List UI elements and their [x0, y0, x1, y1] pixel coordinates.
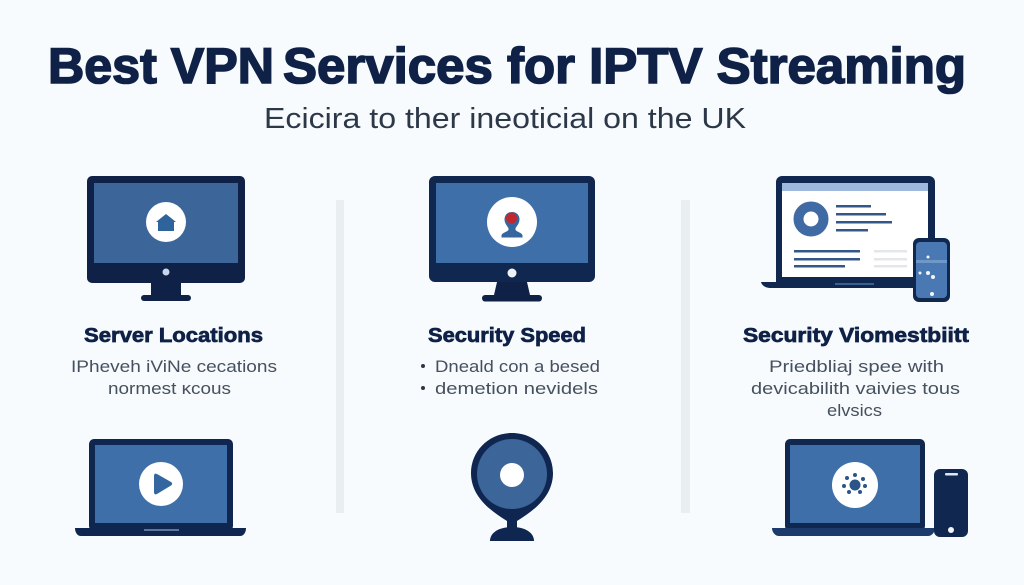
title: Services for IPTV Streaming [283, 38, 966, 94]
text: security description [751, 358, 960, 420]
icon: laptop and phone dashboard [761, 176, 950, 302]
icon: monitor with user [429, 176, 595, 302]
text: security speed bullets [421, 358, 600, 398]
text: server locations description: normest ĸcous [108, 380, 231, 398]
heading: security speed: Security Speed [428, 325, 586, 347]
text: security description: Priedbliaj spee with [769, 358, 944, 376]
heading: security viomestbiitt: Security Viomestbiitt [743, 325, 969, 347]
icon: laptop and phone with network [772, 439, 968, 537]
divider right [681, 200, 690, 513]
icon: laptop with play button [75, 439, 246, 536]
text: security speed bullets: demetion nevidels [435, 380, 598, 398]
text: security description: elvsics [827, 402, 882, 420]
text: server locations description [71, 358, 277, 398]
subtitle: Ecicira to ther ineoticial on the UK [264, 103, 747, 135]
text: security description: devicabilith vaivies tous [751, 380, 960, 398]
divider left [336, 200, 344, 513]
icon: monitor with home [87, 176, 245, 301]
title: Best VPN [48, 38, 274, 94]
heading: server locations: Server Locations [84, 325, 263, 347]
text: server locations description: IPheveh iViNe cecations [71, 358, 277, 376]
icon: webcam [471, 433, 553, 541]
text: security speed bullets: Dneald con a besed [435, 358, 600, 376]
